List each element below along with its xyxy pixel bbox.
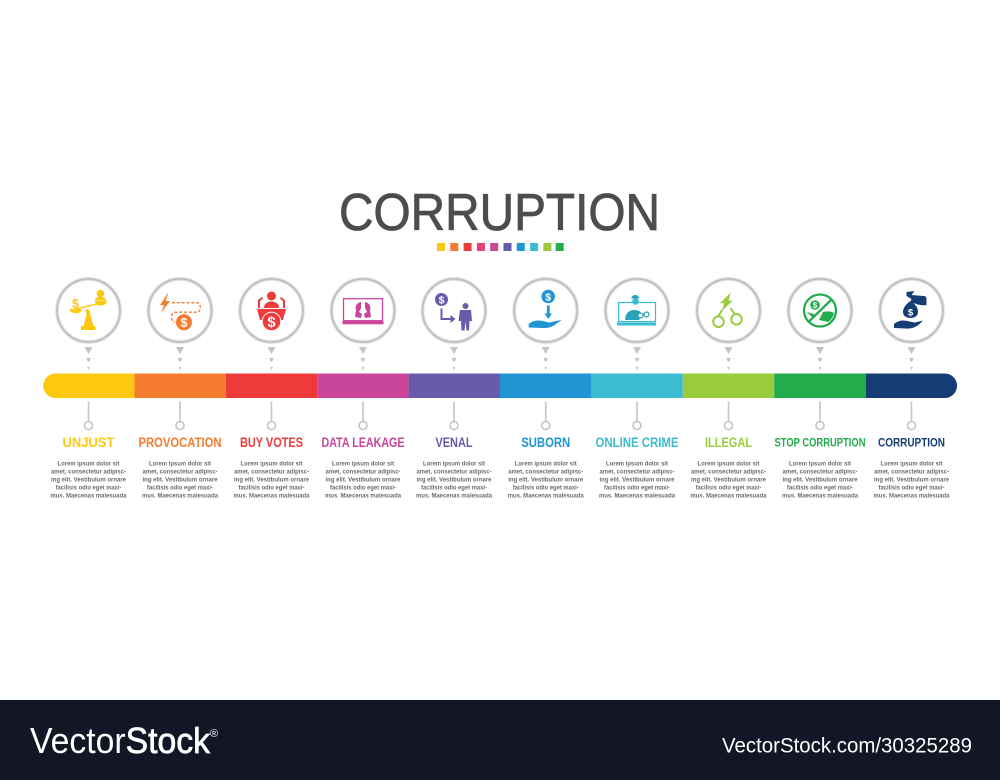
- label: ONLINE CRIME: [596, 435, 678, 450]
- description: [508, 460, 584, 500]
- description: facilisis odio eget maxi-: [513, 484, 579, 492]
- connector triangles: [268, 347, 276, 370]
- stem and node: [176, 402, 184, 430]
- label: DATA LEAKAGE: [322, 435, 404, 450]
- footer logo: VectorStock: [30, 720, 211, 761]
- description: [874, 460, 950, 500]
- description: Lorem ipsum dolor sit: [606, 460, 669, 468]
- description: facilisis odio eget maxi-: [787, 484, 853, 492]
- stem and node: [450, 402, 458, 430]
- description: ing elit. Vestibulum ornare: [782, 476, 858, 484]
- description: [690, 460, 767, 500]
- description: ing elit. Vestibulum ornare: [416, 476, 492, 484]
- connector triangles: [633, 347, 641, 370]
- description: facilisis odio eget maxi-: [56, 484, 122, 492]
- stem and node: [633, 402, 641, 430]
- description: ing elit. Vestibulum ornare: [874, 476, 949, 484]
- description: Lorem ipsum dolor sit: [58, 460, 120, 468]
- description: Lorem ipsum dolor sit: [423, 460, 486, 468]
- description: facilisis odio eget maxi-: [421, 484, 487, 492]
- description: mus. Maecenas malesuada: [690, 492, 767, 500]
- icon: bolt to coin: [160, 293, 200, 330]
- title: CORRUPTION: [339, 184, 660, 242]
- connector triangles: [908, 347, 916, 370]
- icon: person with coin: [257, 292, 286, 331]
- description: amet, consectetur adipisc-: [508, 468, 583, 476]
- description: amet, consectetur adipisc-: [234, 468, 309, 476]
- icon: prohibited bribe: $: [813, 301, 818, 310]
- description: amet, consectetur adipisc-: [600, 468, 674, 476]
- timeline bar: [43, 374, 957, 398]
- description: mus. Maecenas malesuada: [416, 492, 492, 500]
- description: mus. Maecenas malesuada: [234, 492, 310, 500]
- icon: coin into hand: [529, 290, 562, 328]
- description: [142, 460, 218, 500]
- column: corruption: [874, 279, 950, 500]
- icon: coin into hand: $: [545, 292, 551, 304]
- icon: unbalanced scales: [70, 290, 107, 330]
- description: Lorem ipsum dolor sit: [332, 460, 395, 468]
- description: ing elit. Vestibulum ornare: [142, 476, 218, 484]
- icon: person with coin: $: [267, 315, 276, 331]
- description: ing elit. Vestibulum ornare: [508, 476, 584, 484]
- connector triangles: [816, 347, 824, 370]
- label: ILLEGAL: [705, 435, 752, 450]
- footer band: [0, 700, 1000, 780]
- icon: money bag over hand: $: [908, 308, 914, 318]
- description: mus. Maecenas malesuada: [50, 492, 127, 500]
- description: facilisis odio eget maxi-: [330, 484, 396, 492]
- description: amet, consectetur adipisc-: [782, 468, 858, 476]
- description: mus. Maecenas malesuada: [508, 492, 584, 500]
- label: CORRUPTION: [878, 436, 945, 450]
- description: Lorem ipsum dolor sit: [789, 460, 852, 468]
- icon: prohibited bribe: [804, 294, 836, 326]
- description: amet, consectetur adipisc-: [142, 468, 218, 476]
- column: suborn: [508, 279, 584, 500]
- description: mus. Maecenas malesuada: [874, 492, 950, 500]
- description: ing elit. Vestibulum ornare: [600, 476, 675, 484]
- label: SUBORN: [521, 435, 570, 450]
- icon: laptop with lock: [342, 299, 384, 324]
- stem and node: [268, 402, 276, 430]
- stem and node: [816, 402, 824, 430]
- description: facilisis odio eget maxi-: [696, 484, 762, 492]
- description: [50, 460, 127, 500]
- description: facilisis odio eget maxi-: [238, 484, 304, 492]
- description: amet, consectetur adipisc-: [874, 468, 949, 476]
- icon: money bag over hand: [894, 291, 926, 329]
- description: mus. Maecenas malesuada: [325, 492, 401, 500]
- column: unjust: [50, 279, 127, 500]
- description: ing elit. Vestibulum ornare: [691, 476, 766, 484]
- connector triangles: [84, 347, 92, 370]
- description: [234, 460, 310, 500]
- label: VENAL: [436, 435, 472, 450]
- description: Lorem ipsum dolor sit: [240, 460, 303, 468]
- label: PROVOCATION: [138, 435, 222, 450]
- icon: coin arrow to person: [435, 293, 472, 330]
- connector triangles: [176, 347, 184, 370]
- colour squares row: [437, 243, 564, 251]
- column: stop corruption: [774, 279, 866, 500]
- label: STOP CORRUPTION: [774, 436, 866, 450]
- icon: unbalanced scales: $: [72, 297, 79, 311]
- connector triangles: [542, 347, 550, 370]
- registered mark: ®: [210, 728, 218, 740]
- description: amet, consectetur adipisc-: [326, 468, 400, 476]
- description: facilisis odio eget maxi-: [147, 484, 213, 492]
- description: mus. Maecenas malesuada: [599, 492, 675, 500]
- connector triangles: [724, 347, 732, 370]
- description: mus. Maecenas malesuada: [782, 492, 858, 500]
- stem and node: [359, 402, 367, 430]
- footer url: VectorStock.com/30325289: [722, 734, 972, 758]
- column: buy votes: [234, 279, 310, 500]
- description: Lorem ipsum dolor sit: [149, 460, 212, 468]
- description: ing elit. Vestibulum ornare: [234, 476, 309, 484]
- description: amet, consectetur adipisc-: [51, 468, 126, 476]
- description: ing elit. Vestibulum ornare: [51, 476, 126, 484]
- connector triangles: [359, 347, 367, 370]
- column: illegal: [690, 279, 767, 500]
- description: facilisis odio eget maxi-: [878, 484, 944, 492]
- stem and node: [542, 402, 550, 430]
- description: [325, 460, 401, 500]
- icon: laptop with officer and handcuffs: [617, 295, 656, 326]
- stem and node: [724, 402, 732, 430]
- description: [416, 460, 492, 500]
- description: ing elit. Vestibulum ornare: [326, 476, 401, 484]
- description: facilisis odio eget maxi-: [604, 484, 670, 492]
- icon: coin arrow to person: $: [439, 294, 445, 306]
- description: Lorem ipsum dolor sit: [880, 460, 943, 468]
- label: BUY VOTES: [240, 435, 303, 450]
- column: venal: [416, 279, 492, 500]
- description: mus. Maecenas malesuada: [142, 492, 218, 500]
- icon: bolt and handcuffs: [713, 292, 742, 327]
- stem and node: [908, 402, 916, 430]
- column: online crime: [596, 279, 678, 500]
- icon: bolt to coin: $: [181, 316, 188, 330]
- description: amet, consectetur adipisc-: [691, 468, 766, 476]
- description: [782, 460, 858, 500]
- column: data leakage: [322, 279, 404, 500]
- description: amet, consectetur adipisc-: [416, 468, 492, 476]
- connector triangles: [450, 347, 458, 370]
- description: [599, 460, 675, 500]
- column: provocation: [138, 279, 222, 500]
- label: UNJUST: [62, 435, 115, 450]
- stem and node: [84, 402, 92, 430]
- description: Lorem ipsum dolor sit: [515, 460, 578, 468]
- description: Lorem ipsum dolor sit: [698, 460, 760, 468]
